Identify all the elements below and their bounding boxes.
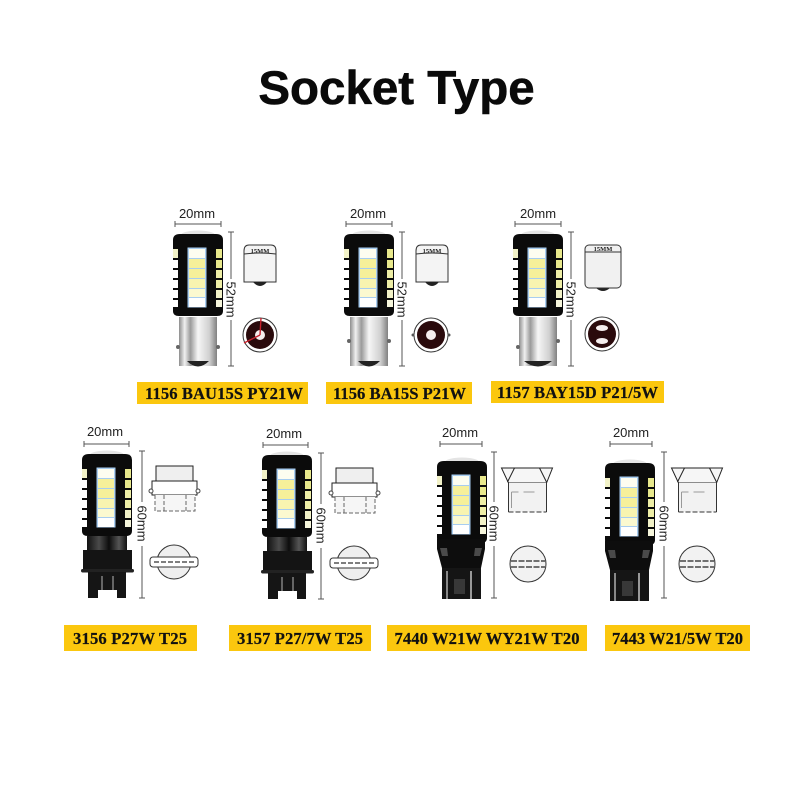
product: 3156 P27W T25: [64, 424, 200, 651]
icon: pin layout: [412, 318, 450, 352]
icon: bulb 1157 BAY15D: [513, 230, 563, 366]
product: 3157 P27/7W T25: [229, 426, 380, 651]
label: [64, 625, 197, 651]
dimension: height 60mm: [486, 452, 502, 598]
product: 1156 BAU15S PY21W: [137, 206, 308, 404]
icon: side drawing: [329, 468, 380, 513]
dimension: height 60mm: 60mm: [314, 507, 328, 544]
icon: bulb 3157: [261, 452, 314, 599]
icon: side drawing: [149, 466, 200, 511]
icon: side drawing: [244, 245, 276, 286]
dimension: width 20mm: 20mm: [442, 425, 478, 440]
dimension: width 20mm: [84, 424, 129, 447]
icon: bulb 1156 BA15S: [344, 230, 394, 366]
dimension: height 60mm: [134, 451, 150, 598]
label: 1156 BAU15S PY21W: [145, 384, 303, 403]
icon: side drawing: [585, 245, 621, 291]
dimension: height 60mm: [314, 453, 328, 599]
label: 1157 BAY15D P21/5W: [497, 383, 658, 402]
icon: side drawing: 15MM: [423, 248, 441, 255]
product: 1156 BA15S P21W: [326, 206, 472, 404]
dimension: width 20mm: [346, 206, 392, 227]
icon: bulb 3156: [81, 450, 134, 598]
dimension: height 60mm: 60mm: [656, 505, 672, 542]
product: 7440 W21W WY21W T20: [387, 425, 587, 651]
icon: pin layout: [150, 545, 198, 579]
product: 1157 BAY15D P21/5W: [491, 206, 664, 403]
icon: pin layout: [585, 317, 619, 351]
label: 3156 P27W T25: [73, 629, 187, 648]
label: 7440 W21W WY21W T20: [394, 629, 580, 648]
icon: side drawing: 15MM: [594, 246, 612, 253]
icon: side drawing: [416, 245, 448, 286]
dimension: width 20mm: 20mm: [520, 206, 556, 221]
icon: side drawing: [672, 468, 722, 512]
icon: bulb 1156 BAU15S: [173, 230, 223, 366]
dimension: height 52mm: 52mm: [394, 281, 410, 318]
icon: pin layout: [679, 546, 715, 582]
dimension: height 52mm: [394, 232, 410, 366]
dimension: height 52mm: 52mm: [224, 281, 238, 318]
icon: pin layout: [243, 318, 277, 352]
dimension: width 20mm: [263, 426, 308, 448]
label: [605, 625, 750, 651]
icon: side drawing: [502, 468, 552, 512]
dimension: width 20mm: 20mm: [350, 206, 386, 221]
dimension: height 60mm: 60mm: [134, 505, 150, 542]
label: 1156 BA15S P21W: [333, 384, 466, 403]
icon: pin layout: [510, 546, 546, 582]
dimension: height 52mm: [564, 232, 578, 366]
dimension: width 20mm: [175, 206, 221, 227]
label: [229, 625, 371, 651]
dimension: width 20mm: 20mm: [613, 425, 649, 440]
dimension: width 20mm: [515, 206, 561, 227]
dimension: width 20mm: 20mm: [87, 424, 123, 439]
dimension: width 20mm: [440, 425, 482, 447]
icon: pin layout: [330, 546, 378, 580]
dimension: height 60mm: 60mm: [486, 505, 502, 542]
icon: bulb 7443: [605, 460, 655, 601]
dimension: width 20mm: [610, 425, 652, 447]
icon: side drawing: 15MM: [251, 248, 269, 255]
dimension: width 20mm: 20mm: [266, 426, 302, 441]
title: Socket Type: [258, 62, 535, 115]
label: [387, 625, 587, 651]
dimension: width 20mm: 20mm: [179, 206, 215, 221]
dimension: height 52mm: 52mm: [564, 281, 578, 318]
label: 3157 P27/7W T25: [237, 629, 363, 648]
label: 7443 W21/5W T20: [612, 629, 743, 648]
dimension: height 60mm: [656, 452, 672, 598]
dimension: height 52mm: [224, 232, 238, 366]
icon: bulb 7440: [437, 458, 487, 599]
product: 7443 W21/5W T20: [605, 425, 750, 651]
